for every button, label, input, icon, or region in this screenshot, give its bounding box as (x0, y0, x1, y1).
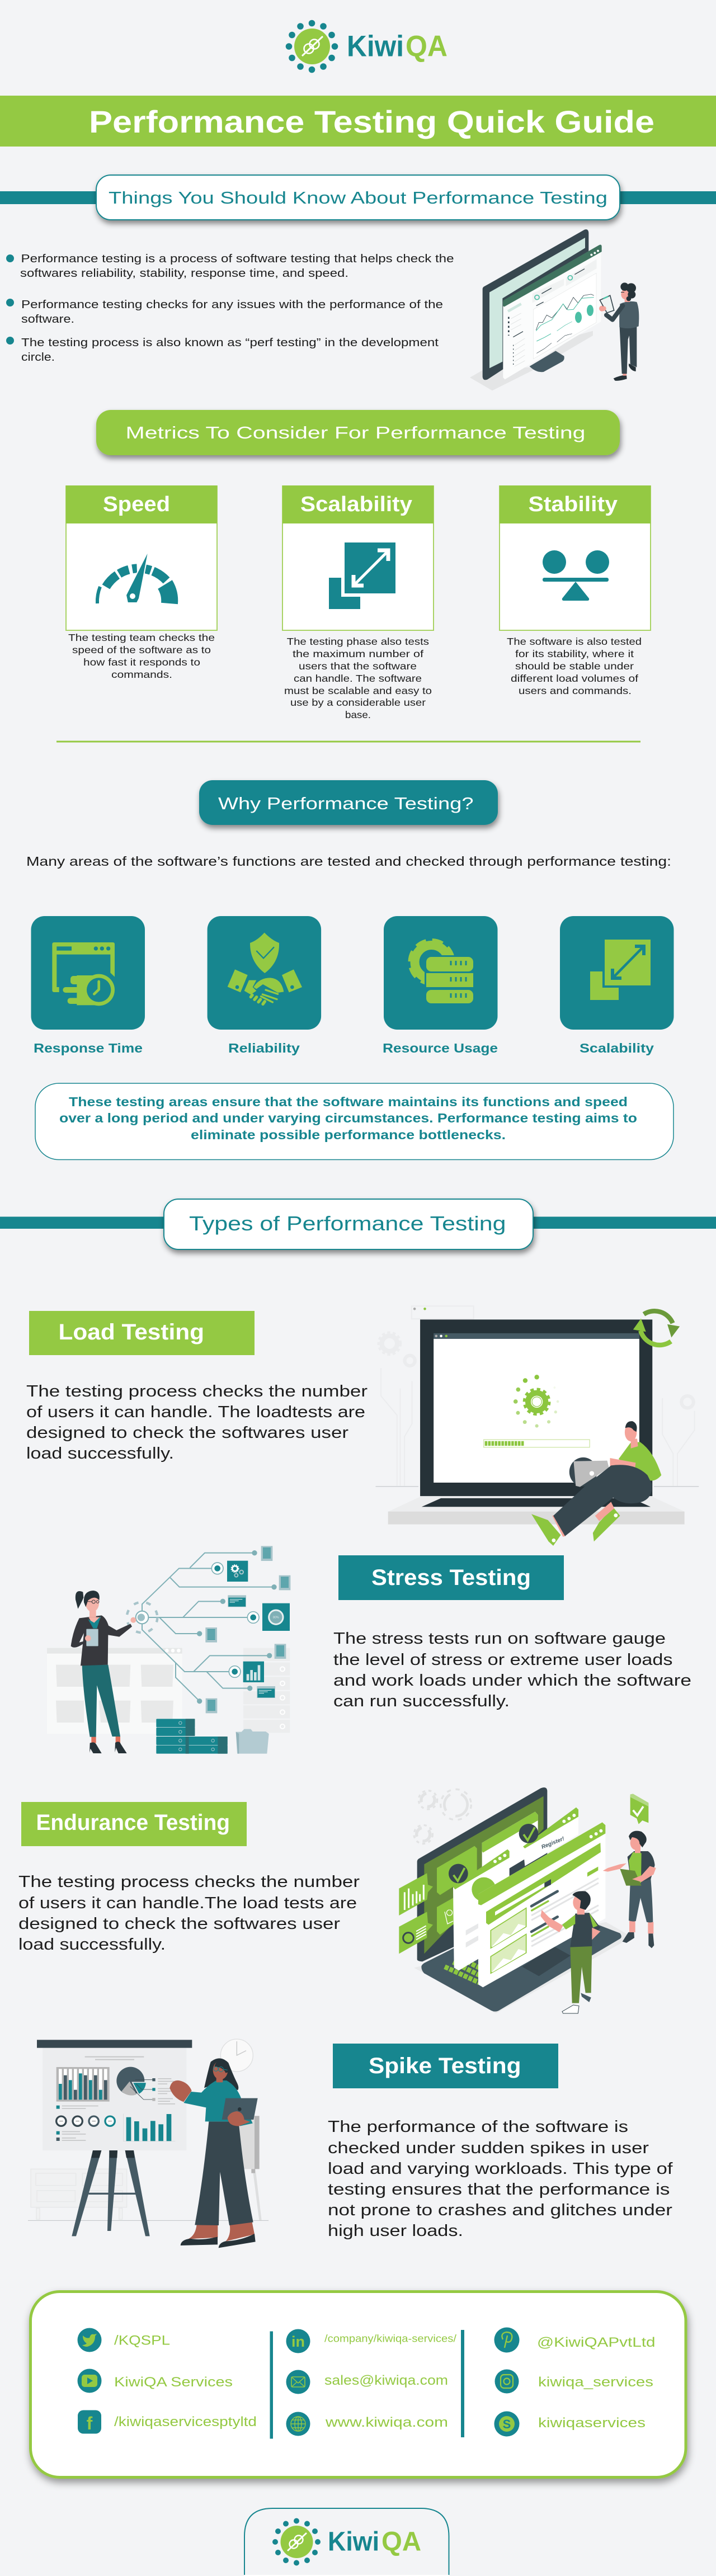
front window (478, 1822, 605, 1987)
title banner: Performance Testing Quick Guide (89, 104, 654, 139)
heading: metrics to consider (96, 410, 620, 455)
back board (239, 2116, 262, 2220)
link: linkedin: /company/kiwiqa-services/ (324, 2333, 456, 2344)
presenter (169, 2058, 258, 2248)
text: intro to tested areas: Many areas of the software’s functions are tested and checked through performance testing: (26, 854, 671, 869)
panel: speed metric (66, 485, 217, 680)
link: twitter: /KQSPL (114, 2333, 170, 2348)
illustration: person with laptop in front of loading screen (375, 1306, 699, 1546)
link: linkedin: in (291, 2333, 305, 2350)
panel: spike testing: high user loads. (328, 2222, 463, 2240)
illustration: man reviewing dashboard on monitor (470, 229, 639, 390)
back windows (482, 1811, 538, 1885)
server stack (156, 1719, 228, 1754)
panel: speed metric: commands. (111, 669, 172, 680)
stacked bar chart (56, 2067, 110, 2102)
panel: scalability metric: can handle. The software (294, 673, 422, 684)
icon: shield and handshake (228, 933, 302, 1004)
clock (220, 2039, 253, 2072)
logo wordmark: Kiwi (328, 2527, 379, 2557)
logo wordmark: QA (381, 2527, 421, 2557)
panel: scalability metric: users that the software (299, 660, 417, 672)
logo wordmark: QA (406, 30, 447, 63)
panel: endurance testing (18, 1802, 360, 1954)
icon: gear and server stack (411, 941, 475, 1006)
link: skype (494, 2412, 646, 2436)
title banner (0, 96, 716, 147)
link: instagram: kiwiqa_services (538, 2375, 653, 2390)
panel: load testing: designed to check the softwares user (26, 1424, 348, 1442)
pie chart (116, 2067, 175, 2105)
heading: types of performance testing (0, 1199, 716, 1249)
seated person (531, 1421, 661, 1546)
link: facebook: f (87, 2413, 93, 2433)
green cards (437, 1846, 477, 1895)
tile: resource usage (383, 916, 498, 1055)
panel: endurance testing: designed to check the softwares user (18, 1915, 340, 1933)
link: facebook: /kiwiqaservicesptyltd (114, 2414, 257, 2429)
link: email (286, 2370, 448, 2394)
link: website: www.kiwiqa.com (325, 2415, 448, 2430)
panel: stability metric: The software is also tested (507, 636, 642, 647)
panel: stability metric: users and commands. (519, 685, 632, 696)
panel: stress testing: Stress Testing (371, 1565, 531, 1590)
link: linkedin (286, 2329, 456, 2353)
panel: stability metric: for its stability, where it (515, 648, 634, 659)
heading: types of performance testing: Types of Performance Testing (189, 1212, 506, 1235)
tile: reliability (208, 916, 321, 1055)
panel: endurance testing: of users it can handle.The load tests are (18, 1894, 357, 1912)
panel: load testing (26, 1311, 368, 1462)
hub (127, 1602, 157, 1633)
panel: stress testing: and work loads under which the software (333, 1672, 691, 1690)
link: youtube: KiwiQA Services (114, 2375, 233, 2390)
panel: load testing: Load Testing (58, 1320, 204, 1344)
icon: resize arrows (329, 542, 395, 609)
bullet list: facts about performance testing: software. (21, 313, 74, 325)
logo: KiwiQA header (286, 20, 447, 73)
footer logo card (244, 2508, 449, 2576)
teal panels: 80% (273, 1616, 279, 1620)
bullet list: facts about performance testing (6, 253, 454, 364)
speech check badge (630, 1795, 648, 1824)
panel: speed metric: how fast it responds to (83, 657, 200, 668)
illustration: woman operating data tree (47, 1546, 290, 1754)
panel: spike testing: testing ensures that the performance is (328, 2181, 670, 2198)
tags (399, 1873, 433, 1916)
link: instagram (494, 2369, 653, 2394)
panel: spike testing: The performance of the software is (328, 2118, 628, 2136)
link: website (286, 2412, 448, 2436)
bullet list: facts about performance testing: Performance testing is a process of software testing that helps check the (21, 253, 454, 265)
woman (71, 1591, 136, 1753)
panel: endurance testing: Endurance Testing (36, 1810, 230, 1835)
panel: stability metric (500, 485, 651, 696)
panel: contact and social links (30, 2292, 686, 2478)
icon: logo mark (286, 20, 338, 73)
panel: stress testing: can run successfully. (333, 1692, 510, 1710)
tile: reliability: Reliability (228, 1041, 300, 1055)
front person (541, 1891, 600, 2013)
icon: balance scale (543, 550, 609, 601)
panel: stability metric: Stability (528, 493, 618, 516)
icon: logo mark (272, 2518, 321, 2566)
panel: load testing: load successfully. (26, 1445, 174, 1462)
documents (205, 1546, 290, 1713)
panel: spike testing: load and varying workloads. This type of (328, 2160, 673, 2178)
folder (236, 1729, 269, 1754)
panel: scalability metric: the maximum number of (293, 648, 423, 659)
panel: stress testing: The stress tests run on software gauge (333, 1630, 666, 1648)
link: skype: kiwiqaservices (538, 2415, 646, 2431)
recycle arrows (644, 1311, 673, 1323)
link: youtube (77, 2369, 233, 2393)
panel: stress testing: the level of stress or extreme user loads (333, 1651, 672, 1669)
panel: speed metric: The testing team checks the (68, 632, 215, 643)
callout: testing areas summary (35, 1083, 673, 1160)
tile: response time: Response Time (34, 1041, 143, 1055)
panel: spike testing: checked under sudden spikes in user (328, 2139, 649, 2157)
illustration: woman presenting charts on easel (28, 2039, 268, 2248)
easel (37, 2040, 192, 2236)
callout: testing areas summary: These testing areas ensure that the software maintains its functions and speed (69, 1094, 628, 1109)
panel: stress testing (333, 1555, 691, 1710)
link: twitter (77, 2328, 170, 2352)
bullet list: facts about performance testing: circle. (21, 351, 55, 364)
panel: spike testing: Spike Testing (369, 2054, 521, 2078)
panel: speed metric: speed of the software as to (72, 644, 211, 655)
teal panels (227, 1561, 290, 1698)
panel: speed metric: Speed (103, 493, 170, 516)
heading: metrics to consider: Metrics To Consider For Performance Testing (125, 423, 585, 442)
panel: load testing: The testing process checks the number (26, 1383, 368, 1400)
right person (603, 1831, 656, 1948)
bullet list: facts about performance testing: softwares reliability, stability, response time, and speed. (20, 267, 348, 280)
panel: spike testing: not prone to crashes and glitches under (328, 2201, 672, 2219)
link: pinterest: @KiwiQAPvtLtd (537, 2335, 656, 2350)
illustration: two people reviewing web pages on laptop: Register! (540, 1836, 566, 1851)
panel: stability metric: different load volumes of (511, 673, 638, 684)
panel: stability metric: should be stable under (515, 660, 634, 672)
panel: scalability metric (282, 485, 434, 720)
data tree lines (142, 1553, 274, 1701)
bullet list: facts about performance testing: Performance testing checks for any issues with the performance of the (21, 299, 443, 311)
icon: resize arrows (590, 940, 651, 1000)
panel: scalability metric: base. (345, 709, 371, 720)
panel: endurance testing: The testing process checks the number (18, 1873, 360, 1891)
link: skype: S (503, 2417, 511, 2431)
bar chart (126, 2114, 171, 2141)
icon: speedometer gauge (97, 550, 175, 603)
check badges (449, 1824, 538, 1883)
gear loader (514, 1375, 559, 1428)
person (599, 282, 639, 381)
tile: scalability (560, 916, 673, 1055)
panel: scalability metric: must be scalable and easy to (284, 685, 432, 696)
tile: scalability: Scalability (580, 1041, 654, 1055)
panel: spike testing (328, 2044, 673, 2240)
heading: why performance testing (199, 780, 498, 825)
panel: endurance testing: load successfully. (18, 1936, 166, 1954)
callout: testing areas summary: eliminate possible performance bottlenecks. (191, 1127, 506, 1142)
panel: scalability metric: Scalability (300, 493, 412, 516)
heading: why performance testing: Why Performance Testing? (218, 794, 473, 813)
tile: response time (31, 916, 145, 1055)
link: pinterest (494, 2328, 656, 2352)
panel: scalability metric: use by a considerable user (290, 697, 426, 708)
callout: testing areas summary: over a long period and under varying circumstances. Performance testing aims to (59, 1111, 637, 1125)
link: facebook (78, 2410, 257, 2434)
illustration: two people reviewing web pages on laptop (399, 1787, 656, 2013)
heading: things you should know: Things You Should Know About Performance Testing (109, 188, 607, 207)
tile: resource usage: Resource Usage (383, 1041, 498, 1055)
panel: scalability metric: The testing phase also tests (287, 636, 429, 647)
heading: things you should know (0, 175, 716, 220)
link: email: sales@kiwiqa.com (324, 2373, 448, 2388)
donut gauges (56, 2116, 115, 2126)
icon: window with clock (52, 942, 115, 1006)
logo wordmark: Kiwi (347, 30, 404, 63)
panel: load testing: of users it can handle. The loadtests are (26, 1403, 365, 1421)
bullet list: facts about performance testing: The testing process is also known as “perf testing” in the development (21, 337, 439, 349)
